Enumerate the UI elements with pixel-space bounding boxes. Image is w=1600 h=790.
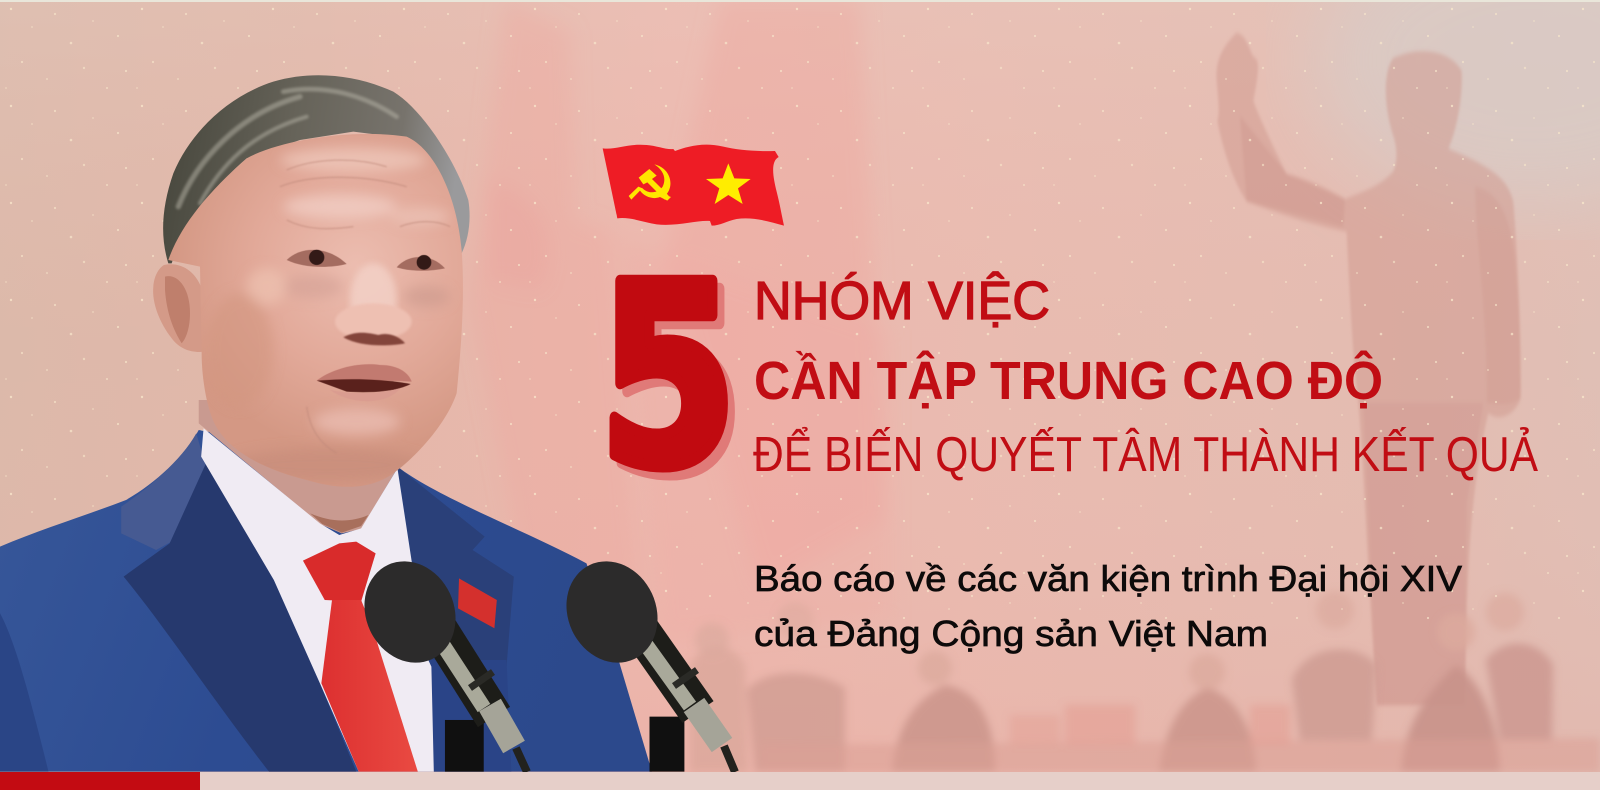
background: seated delegates bbox=[690, 591, 1600, 772]
mouth bbox=[317, 364, 412, 401]
ear bbox=[153, 264, 205, 352]
eyes bbox=[287, 250, 445, 271]
neck bbox=[199, 400, 427, 533]
top edge strip bbox=[0, 0, 1600, 2]
lower lapel bbox=[124, 463, 356, 772]
left microphone bbox=[348, 546, 527, 772]
upper lapel bbox=[121, 433, 206, 550]
heading line 1: NHÓM VIỆC bbox=[754, 271, 1050, 331]
face bbox=[168, 134, 463, 486]
red accent bbox=[0, 772, 200, 790]
bottom bar bbox=[0, 772, 1600, 790]
background: speckles bbox=[0, 0, 1600, 620]
subtitle line 1: Báo cáo về các văn kiện trình Đại hội XIV bbox=[754, 558, 1462, 599]
hammer and sickle bbox=[629, 164, 671, 201]
nose bbox=[335, 263, 412, 345]
heading line 2: CẦN TẬP TRUNG CAO ĐỘ bbox=[754, 350, 1383, 411]
star bbox=[706, 163, 751, 204]
subtitle line 2: của Đảng Cộng sản Việt Nam bbox=[754, 613, 1268, 654]
big number 5: 5 bbox=[599, 231, 737, 522]
background: statue bbox=[1216, 33, 1521, 705]
hair streaks bbox=[178, 89, 397, 207]
neck shadow bbox=[310, 513, 368, 533]
icon: party and national flag bbox=[603, 145, 784, 226]
face shading bbox=[207, 148, 450, 482]
person: head bbox=[140, 75, 480, 500]
heading bbox=[753, 271, 1538, 482]
person: body bbox=[0, 400, 684, 772]
subtitle bbox=[754, 558, 1462, 654]
shirt bbox=[201, 428, 434, 772]
lapel pin bbox=[458, 578, 497, 628]
hair bbox=[163, 75, 470, 263]
wrinkles bbox=[280, 160, 450, 453]
arm crease bbox=[0, 613, 48, 772]
flag cloth bbox=[603, 145, 784, 226]
right lapel bbox=[397, 467, 514, 667]
tie bbox=[303, 542, 418, 772]
suit jacket bbox=[0, 430, 652, 772]
microphone stands bbox=[445, 717, 684, 772]
right microphone bbox=[550, 546, 735, 772]
background: red flags bbox=[470, 0, 890, 640]
